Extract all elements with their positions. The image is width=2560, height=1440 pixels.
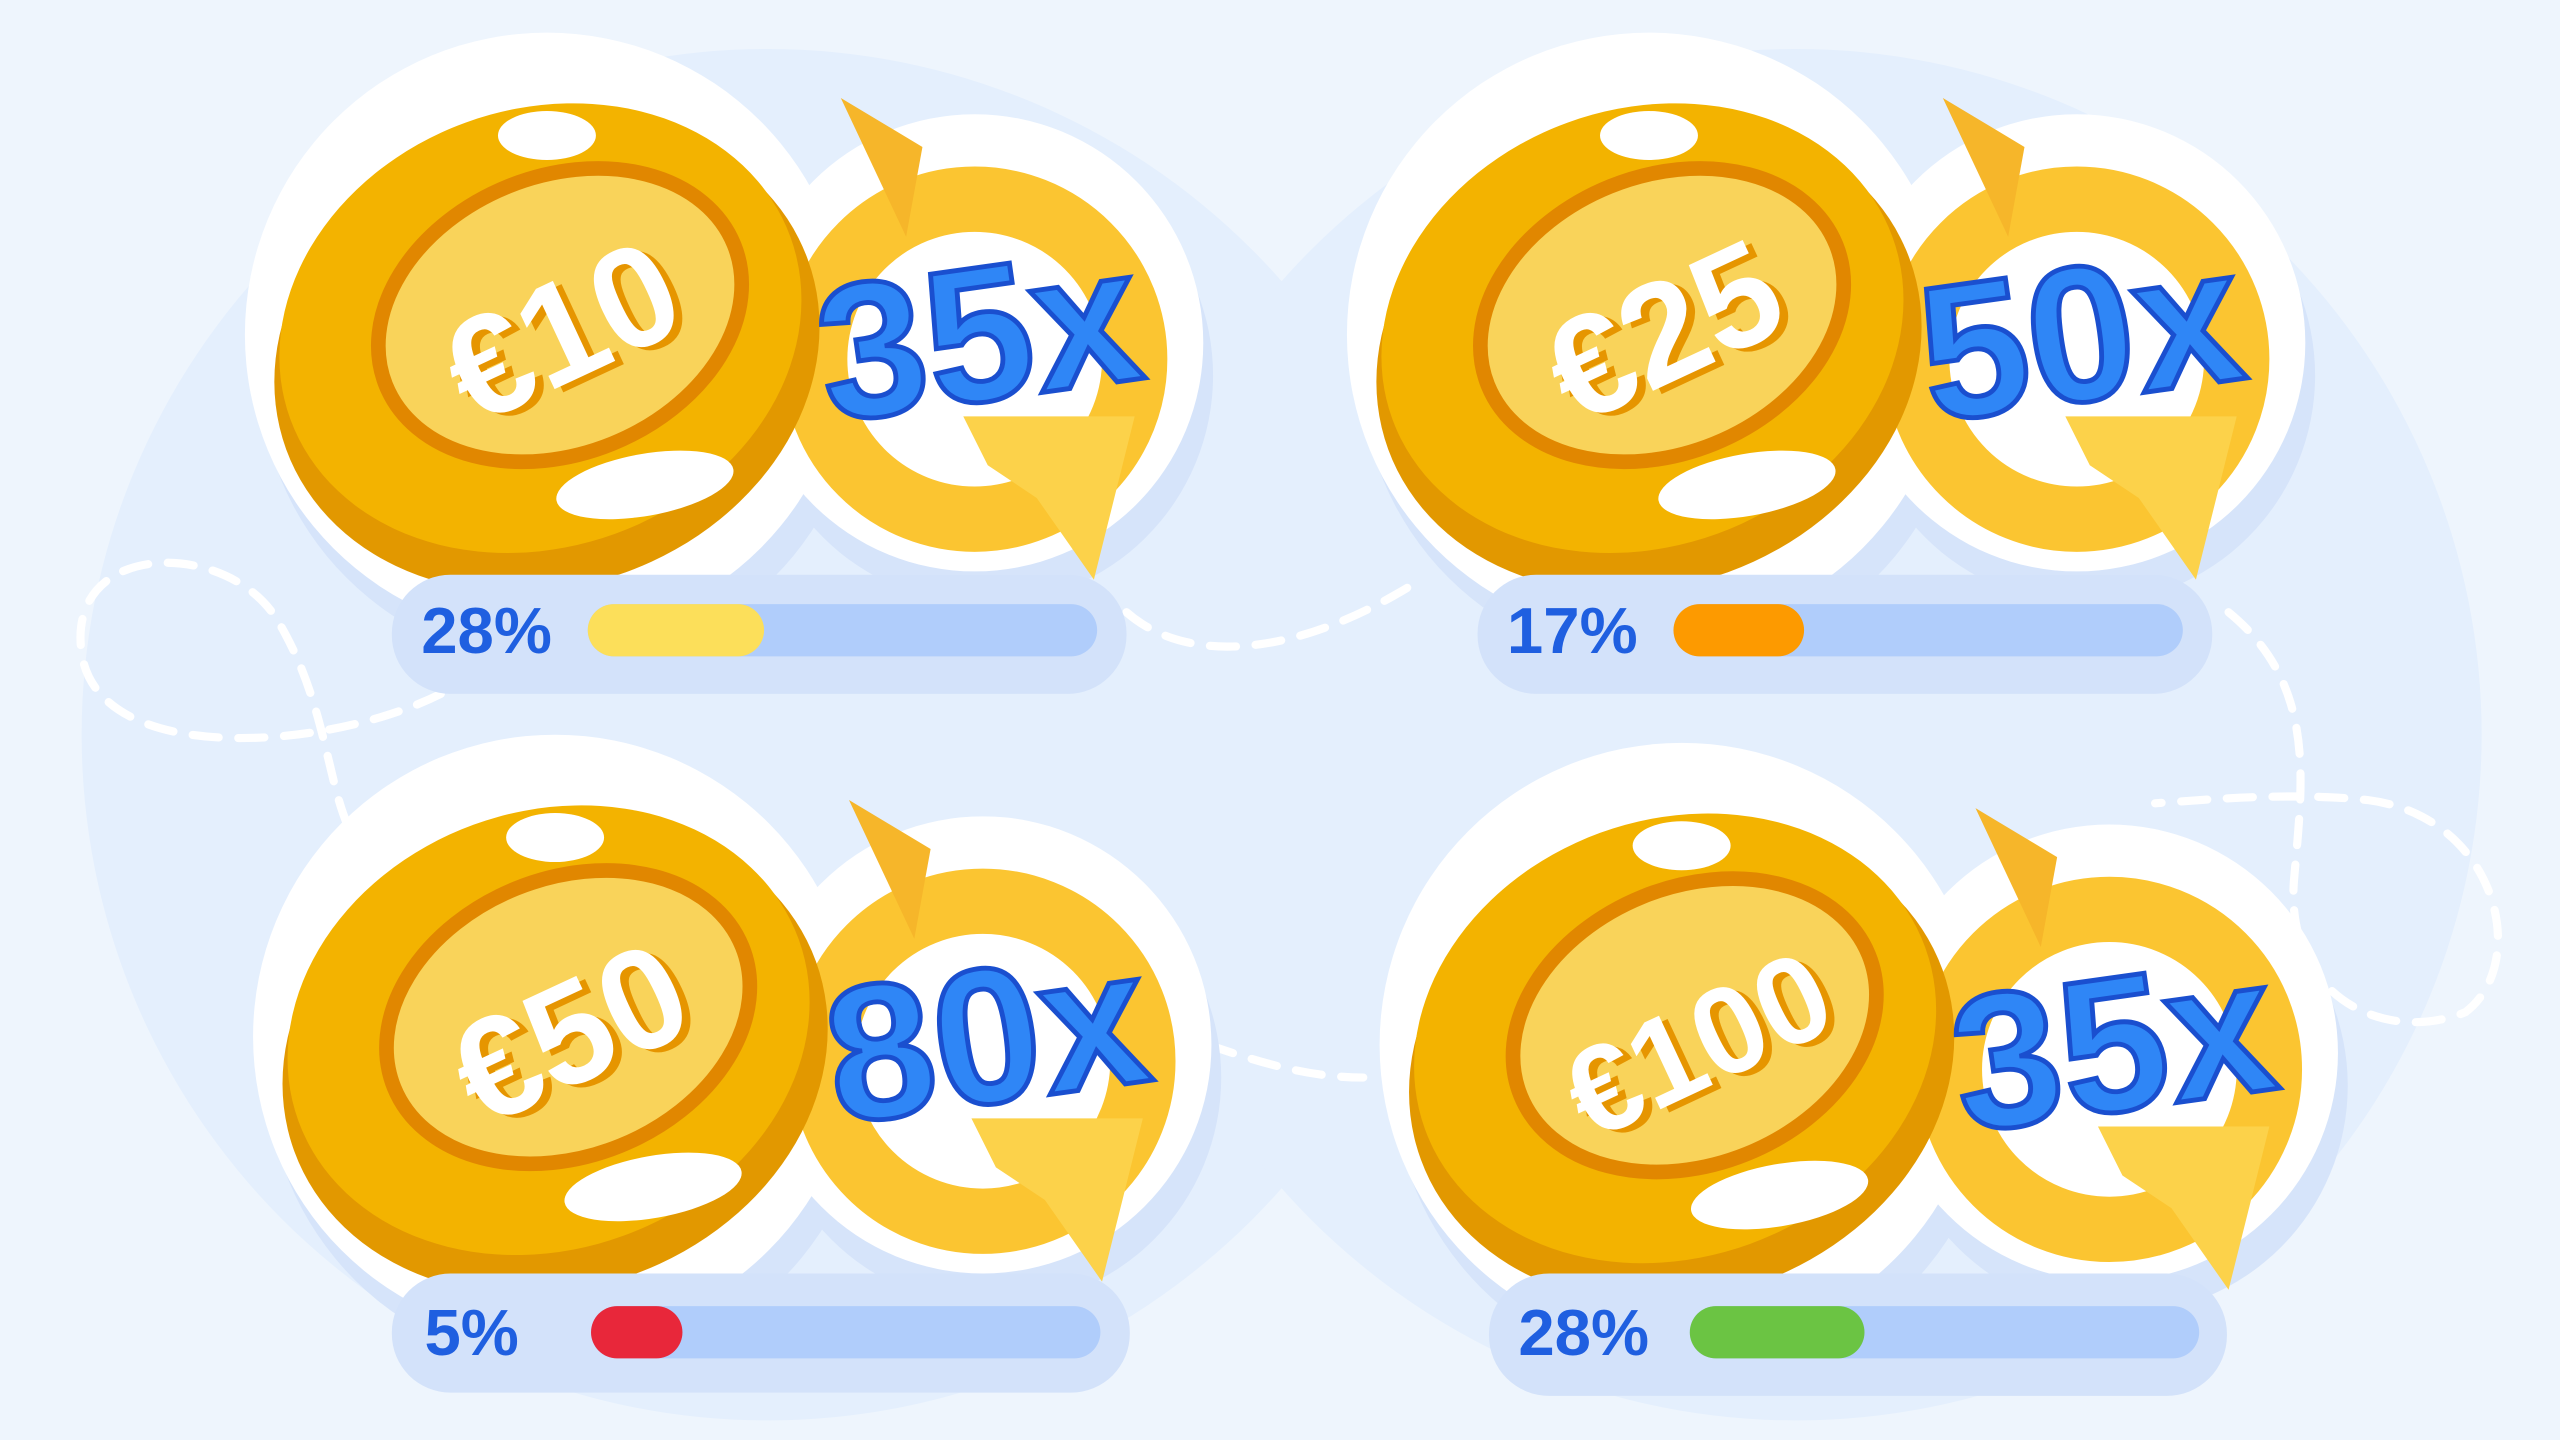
- multiplier: 35x: [804, 205, 1153, 463]
- panel: €100 35x: €100: [1553, 928, 1861, 1169]
- panel: €100 35x: [1342, 742, 2348, 1377]
- dashed path decorations: [80, 563, 2498, 1078]
- panel: €50 80x: 80x: [813, 907, 1161, 1165]
- coin label: €10: [428, 212, 713, 458]
- panel: €100 35x: 35x: [1939, 916, 2287, 1173]
- panel: €25 50x: €25: [1521, 209, 1806, 455]
- progress bar: 5% red: [392, 1273, 1130, 1393]
- panel: €50 80x: [215, 734, 1221, 1369]
- panel: €25 50x: 50x: [1906, 205, 2255, 463]
- progress bar: 28% green: 28%: [1518, 1296, 1649, 1369]
- progress bar: 17% orange: 17%: [1507, 594, 1638, 667]
- progress bar: 5% red: 5%: [424, 1296, 519, 1369]
- panel: €50 80x: €50: [436, 914, 721, 1160]
- progress bar: 28% yellow: 28%: [421, 594, 552, 667]
- progress bar: 17% orange: [1478, 575, 2212, 694]
- panel: €100 35x: €100: [1544, 924, 1852, 1166]
- panel: €25 50x: €25: [1530, 212, 1815, 458]
- coin label: €10: [419, 209, 704, 455]
- progress bar: 28% yellow: [392, 575, 1127, 694]
- panel: €10 35x: [207, 32, 1213, 667]
- panel: €50 80x: €50: [428, 911, 712, 1157]
- progress bar: 28% green: [1489, 1273, 2227, 1396]
- panel: €25 50x: [1309, 32, 2315, 667]
